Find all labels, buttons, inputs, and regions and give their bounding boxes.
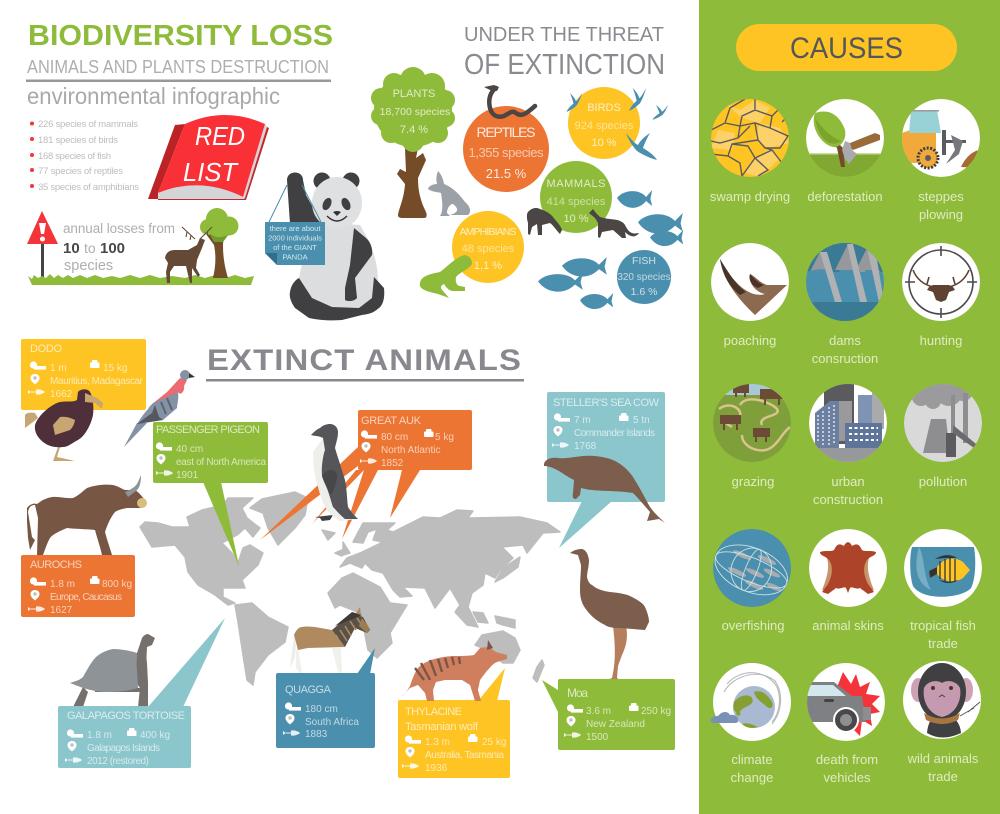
- reptiles circle: [463, 106, 549, 192]
- new zealand: [533, 660, 544, 682]
- icon: wild animals trade: [903, 661, 981, 739]
- threat heading: UNDER THE THREAT: [464, 23, 664, 46]
- panda sign: there are about: [270, 224, 321, 233]
- africa: [328, 573, 407, 658]
- fish icons: [538, 190, 683, 309]
- japan: [495, 557, 520, 582]
- callout: dodo: DODO: [30, 343, 62, 355]
- icon: deer: [165, 227, 212, 283]
- mammal silhouettes: [527, 208, 639, 238]
- hare: [428, 171, 470, 216]
- great auk bird: [311, 424, 358, 521]
- callout: moa: 250 kg: [641, 706, 671, 717]
- label: consruction: [812, 351, 878, 366]
- frog: [420, 255, 472, 298]
- callout: dodo: 1662: [50, 389, 73, 400]
- label: tropical fish: [910, 618, 976, 633]
- species list: 77 species of reptiles: [38, 166, 123, 177]
- callout: dodo: [21, 339, 146, 410]
- fish circle: 1.6 %: [631, 286, 657, 298]
- icon: climate change: [711, 663, 791, 741]
- callout: great auk: 80 cm: [381, 432, 408, 443]
- snake: [484, 85, 535, 117]
- icon: grazing: [713, 384, 791, 462]
- europe and asia: [340, 510, 560, 627]
- icon: poaching: [711, 243, 789, 321]
- ears: [314, 172, 330, 190]
- callout: passenger pigeon: [153, 422, 268, 566]
- callout: passenger pigeon: 40 cm: [176, 444, 203, 455]
- callout: thylacine: 1.3 m: [425, 737, 450, 748]
- callout: galapagos tortoise: GALAPAGOS TORTOISE: [67, 710, 185, 722]
- callout: galapagos tortoise: 400 kg: [140, 730, 170, 741]
- callout: aurochs: [21, 555, 135, 617]
- callout: thylacine: Tasmanian wolf: [405, 721, 479, 733]
- icon: hunting: [902, 243, 980, 321]
- quagga: [290, 607, 370, 678]
- icon: urban construction: [809, 384, 887, 463]
- label: climate: [731, 752, 773, 767]
- icon: overfishing: [713, 529, 791, 607]
- callout: galapagos tortoise: [58, 618, 225, 768]
- callout: thylacine: [398, 668, 510, 778]
- icon: steppes plowing: [902, 99, 981, 177]
- panda sign: PANDA: [282, 252, 308, 262]
- grass: [28, 274, 254, 285]
- raised arm: [287, 172, 322, 224]
- panda: [287, 172, 384, 320]
- panda sign: [265, 185, 325, 265]
- callout: aurochs: 1.8 m: [50, 579, 75, 590]
- callout: quagga: 1883: [305, 729, 328, 740]
- fish circle: 320 species: [617, 272, 671, 283]
- label: wild animals: [907, 751, 979, 766]
- callout: steller's sea cow: STELLER'S SEA COW: [553, 397, 660, 409]
- label: poaching: [724, 333, 776, 348]
- species list: 168 species of fish: [38, 151, 111, 162]
- label: animal skins: [812, 618, 884, 633]
- species list: [30, 119, 139, 193]
- callout: steller's sea cow: 5 tn: [633, 415, 650, 426]
- annual losses text: 10: [63, 240, 80, 257]
- label: dams: [829, 333, 861, 348]
- reptiles circle: 21.5 %: [486, 166, 527, 181]
- amphibians circle: [452, 211, 524, 283]
- callout: thylacine: 1936: [425, 763, 448, 774]
- birds circle: BIRDS: [587, 102, 621, 114]
- title: BIODIVERSITY LOSS: [28, 20, 333, 52]
- callout: passenger pigeon: 1901: [176, 470, 199, 481]
- iceland and uk: [322, 530, 350, 556]
- callout: moa: 1500: [586, 732, 609, 743]
- mammals circle: [540, 161, 612, 233]
- icon: dams construction: [806, 243, 884, 322]
- icon: pollution: [904, 380, 982, 462]
- icon: red list book: LIST: [183, 157, 239, 187]
- callout: quagga: South Africa: [305, 717, 359, 728]
- callout: galapagos tortoise: 1.8 m: [87, 730, 112, 741]
- label: grazing: [732, 474, 774, 489]
- threat heading: OF EXTINCTION: [464, 49, 665, 81]
- threat heading: [464, 23, 665, 81]
- indonesia: [473, 612, 515, 628]
- amphibians circle: 1,1 %: [474, 260, 502, 272]
- callout: aurochs: AUROCHS: [30, 559, 82, 571]
- callout: aurochs: 800 kg: [102, 579, 132, 590]
- label: vehicles: [824, 770, 871, 785]
- label: [731, 752, 773, 785]
- icon: tropical fish trade: [904, 529, 982, 607]
- plants tree: PLANTS: [393, 88, 435, 100]
- callout: aurochs: 1627: [50, 605, 73, 616]
- annual losses text: annual losses from: [63, 221, 175, 236]
- label: [910, 618, 976, 651]
- callout: galapagos tortoise: 2012 (restored): [87, 756, 149, 767]
- callout: moa: [542, 679, 675, 750]
- amphibians circle: 48 species: [462, 243, 515, 255]
- callout: great auk: North Atlantic: [381, 445, 440, 456]
- callout: dodo: 1 m: [50, 363, 67, 374]
- callout: great auk: [260, 410, 472, 540]
- head: [312, 177, 362, 229]
- label: overfishing: [722, 618, 784, 633]
- world map: [140, 492, 560, 685]
- callout: thylacine: 25 kg: [482, 737, 506, 748]
- icon: red list book: RED: [195, 121, 245, 151]
- birds circle: 924 species: [575, 120, 634, 132]
- callout: passenger pigeon: east of North America: [176, 457, 266, 468]
- causes heading: CAUSES: [790, 32, 903, 65]
- label: steppes: [918, 189, 964, 204]
- body: [298, 222, 378, 312]
- subtitle: ANIMALS AND PLANTS DESTRUCTION: [27, 57, 329, 77]
- fish circle: [617, 250, 671, 304]
- label: pollution: [919, 474, 967, 489]
- callout: galapagos tortoise: Galapagos Islands: [87, 743, 160, 754]
- reptiles circle: REPTILES: [476, 124, 536, 140]
- label: death from: [816, 752, 878, 767]
- legs: [290, 277, 384, 320]
- south america: [235, 603, 288, 685]
- label: [816, 752, 878, 785]
- label: [813, 474, 883, 507]
- dodo: [25, 389, 103, 461]
- label: [918, 189, 964, 222]
- heading: extinct animals: EXTINCT ANIMALS: [207, 344, 522, 377]
- panda sign: 2000 individuals: [268, 234, 322, 242]
- birds circle: 10 %: [591, 137, 617, 149]
- callout: aurochs: Europe, Caucasus: [50, 592, 122, 603]
- birds icons: [566, 88, 668, 160]
- thylacine: [387, 640, 507, 703]
- callout: quagga: QUAGGA: [285, 684, 332, 696]
- callout: dodo: 15 kg: [103, 363, 127, 374]
- subtitle line two: environmental infographic: [27, 83, 280, 109]
- greenland: [250, 492, 308, 545]
- callout: steller's sea cow: [547, 392, 665, 548]
- callout: steller's sea cow: Commander Islands: [574, 428, 655, 439]
- label: trade: [928, 769, 958, 784]
- panda sign: of the GIANT: [273, 243, 317, 252]
- plants tree: [371, 67, 455, 218]
- label: trade: [928, 636, 958, 651]
- amphibians circle: AMPHIBIANS: [460, 226, 516, 238]
- fish circle: FISH: [632, 255, 656, 267]
- mammals circle: 414 species: [547, 196, 606, 208]
- label: plowing: [919, 207, 963, 222]
- species list: 226 species of mammals: [38, 119, 138, 130]
- mammals circle: MAMMALS: [546, 178, 606, 190]
- callout: great auk: GREAT AUK: [361, 415, 422, 427]
- plants tree: 7.4 %: [400, 124, 428, 136]
- species list: 35 species of amphibians: [38, 182, 139, 193]
- label: change: [731, 770, 773, 785]
- callout: moa: 3.6 m: [586, 706, 611, 717]
- right arm: [345, 228, 372, 301]
- icon: animal skins: [809, 529, 887, 607]
- callout: steller's sea cow: 7 m: [574, 415, 591, 426]
- icon: deforestation: [806, 99, 884, 178]
- callout: moa: New Zealand: [586, 719, 645, 730]
- icon: swamp drying: [711, 99, 789, 177]
- annual losses text: 100: [100, 240, 125, 257]
- icon: death from vehicles: [807, 663, 885, 741]
- galapagos tortoise: [70, 634, 155, 707]
- panel: causes: [699, 0, 1000, 814]
- australia: [475, 631, 520, 663]
- icon: tree: [200, 208, 238, 278]
- callout: passenger pigeon: PASSENGER PIGEON: [156, 424, 260, 436]
- label: construction: [813, 492, 883, 507]
- callout: great auk: 1852: [381, 458, 404, 469]
- label: [812, 333, 878, 366]
- causes heading: [736, 24, 957, 71]
- callout: quagga: [276, 648, 375, 748]
- icon: red list book: [148, 115, 269, 200]
- north america: [140, 498, 263, 605]
- annual losses text: species: [64, 258, 113, 274]
- label: urban: [831, 474, 865, 489]
- label: deforestation: [807, 189, 883, 204]
- icon: warning sign: [27, 211, 58, 278]
- moa: [570, 549, 649, 683]
- callout: thylacine: THYLACINE: [405, 706, 462, 718]
- callout: quagga: 180 cm: [305, 704, 338, 715]
- sea cow: [544, 456, 665, 523]
- label: hunting: [920, 333, 962, 348]
- birds circle: [568, 87, 640, 159]
- aurochs: [27, 475, 147, 555]
- mammals circle: 10 %: [563, 213, 589, 225]
- callout: steller's sea cow: 1768: [574, 441, 597, 452]
- callout: great auk: 5 kg: [435, 432, 454, 443]
- reptiles circle: 1,355 species: [468, 145, 544, 160]
- annual losses text: to: [84, 240, 96, 256]
- plants tree: 18,700 species: [380, 106, 450, 118]
- callout: moa: Moa: [567, 686, 588, 700]
- annual losses text: [63, 221, 175, 274]
- label: [907, 751, 979, 784]
- callout: thylacine: Australia, Tasmania: [425, 750, 504, 761]
- passenger pigeon: [124, 370, 195, 447]
- callout: dodo: Mauritius, Madagascar: [50, 376, 144, 387]
- label: swamp drying: [710, 189, 790, 204]
- species list: 181 species of birds: [38, 135, 118, 146]
